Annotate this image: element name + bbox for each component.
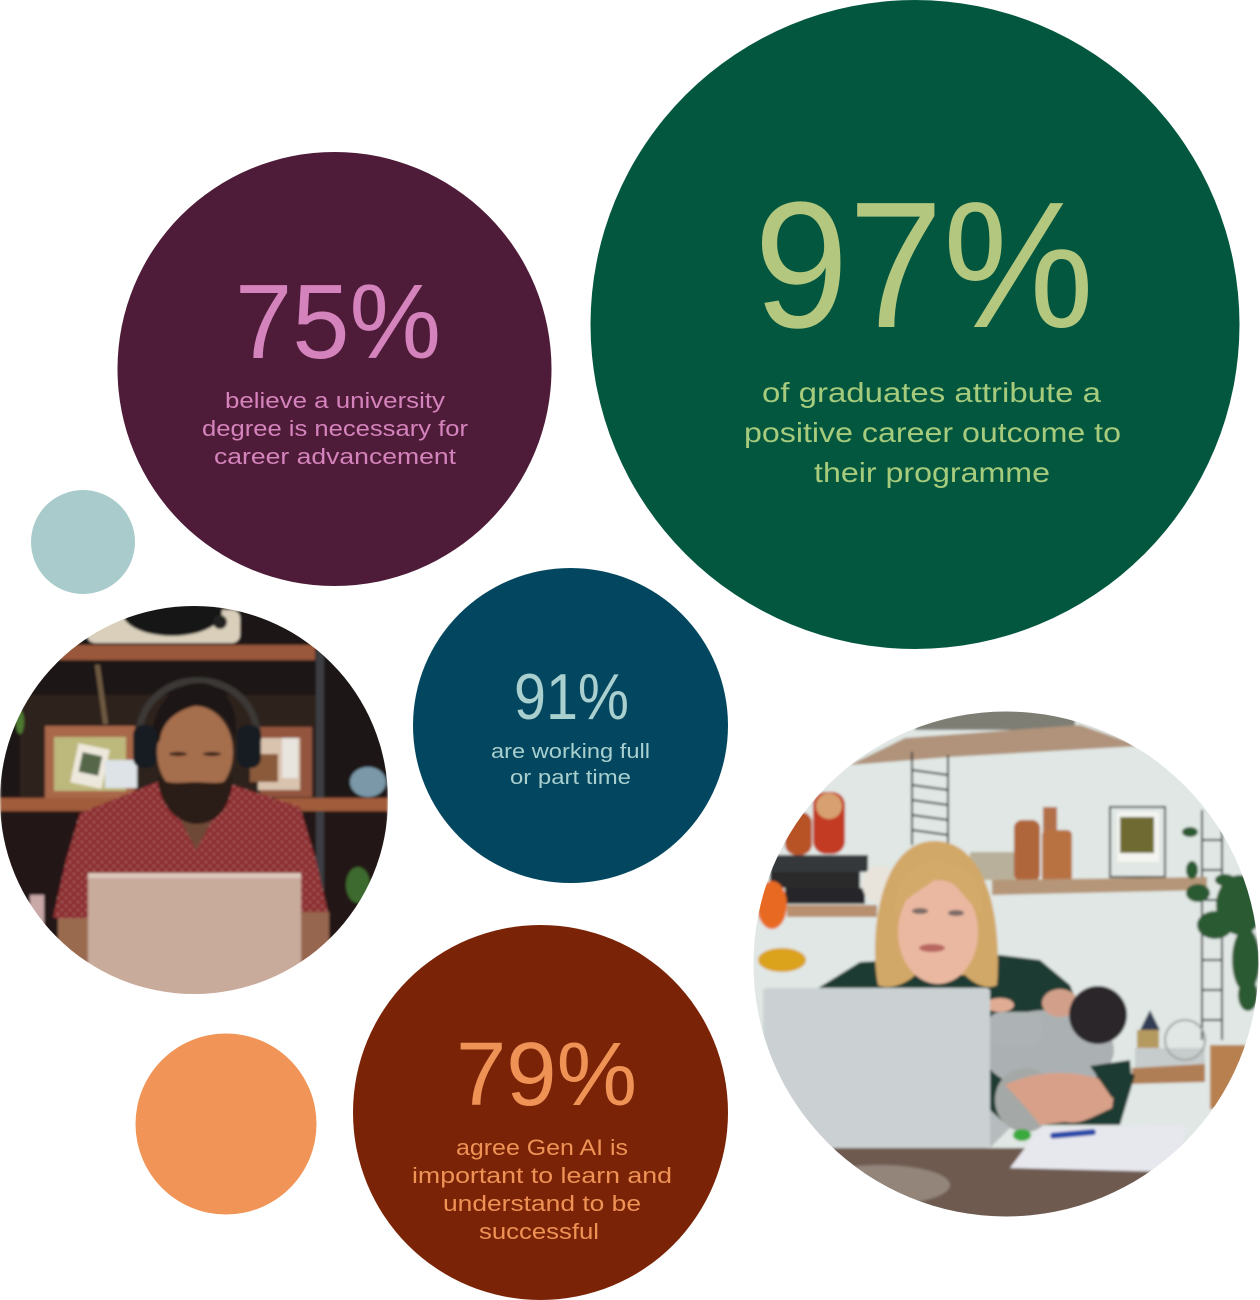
number: 91%: 91% bbox=[514, 660, 629, 733]
number: 97%: 97% bbox=[754, 165, 1094, 366]
panel: 79% statistic bbox=[353, 925, 728, 1300]
text: university degree belief: degree is necessary for bbox=[202, 416, 468, 441]
plant bbox=[1182, 827, 1260, 1011]
text: graduates career outcome: their programme bbox=[814, 457, 1050, 488]
photo: man with headphones at laptop bbox=[0, 588, 388, 998]
text: graduates career outcome: of graduates attribute a bbox=[762, 377, 1101, 408]
text: working full or part time bbox=[491, 741, 650, 789]
baby bbox=[982, 986, 1127, 1132]
panel: 91% statistic bbox=[413, 568, 728, 883]
text: working full or part time: are working full bbox=[491, 741, 650, 763]
text: Gen AI importance bbox=[412, 1135, 672, 1244]
text: university degree belief bbox=[202, 388, 468, 469]
text: Gen AI importance: important to learn and bbox=[412, 1163, 672, 1188]
decorative circle: pale teal bbox=[31, 490, 135, 594]
text: graduates career outcome: positive career outcome to bbox=[744, 417, 1121, 448]
panel: 97% statistic bbox=[590, 0, 1240, 649]
text: graduates career outcome bbox=[744, 377, 1121, 488]
photo: woman with baby at laptop bbox=[750, 705, 1260, 1223]
text: Gen AI importance: successful bbox=[479, 1219, 599, 1244]
number: 79%: 79% bbox=[456, 1025, 637, 1125]
text: working full or part time: or part time bbox=[510, 767, 631, 789]
number: 75%: 75% bbox=[235, 263, 441, 381]
text: university degree belief: career advancement bbox=[214, 444, 456, 469]
decorative circle: orange bbox=[136, 1034, 316, 1214]
text: university degree belief: believe a university bbox=[225, 388, 445, 413]
text: Gen AI importance: agree Gen AI is bbox=[456, 1135, 628, 1160]
text: Gen AI importance: understand to be bbox=[443, 1191, 641, 1216]
panel: 75% statistic bbox=[118, 152, 552, 586]
